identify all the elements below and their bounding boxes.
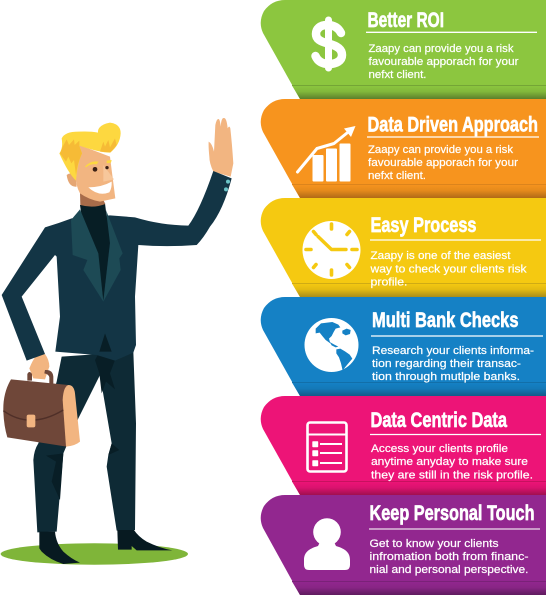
text: Easy Process description: profile. bbox=[370, 276, 408, 288]
icon: globe bbox=[304, 318, 358, 372]
text: Better ROI description: nefxt client. bbox=[368, 69, 426, 81]
heading: Data Centric Data: Data Centric Data bbox=[370, 408, 508, 432]
text: Multi Bank description: tion regarding their transac- bbox=[372, 358, 521, 370]
heading: Better ROI: Better ROI bbox=[368, 8, 444, 32]
head bbox=[59, 123, 121, 207]
ground ellipse bbox=[1, 543, 188, 565]
icon: clock bbox=[302, 221, 360, 279]
figure: lower body bbox=[3, 340, 172, 564]
text: Multi Bank description: Research your clients informa- bbox=[372, 345, 534, 357]
trousers bbox=[33, 352, 136, 532]
panel: Data Centric Data bbox=[261, 396, 546, 495]
panel: Easy Process bbox=[261, 198, 546, 297]
hand holding bag bbox=[29, 354, 49, 379]
text: Better ROI description: favourable apporach for your bbox=[368, 56, 519, 68]
panel: Data Driven Approach bbox=[261, 99, 546, 198]
briefcase bbox=[3, 370, 80, 447]
raised hand bbox=[209, 118, 233, 177]
text: Multi Bank description: tion through mutlple banks. bbox=[372, 371, 520, 383]
text: Data Driven description: favourable apporach for your bbox=[368, 157, 518, 169]
icon: rising bar chart bbox=[298, 126, 356, 182]
figure: upper body bbox=[2, 118, 233, 361]
text: Data Driven description: Zaapy can provide you a risk bbox=[368, 144, 513, 156]
text: Data Centric description: anytime anyday to make sure bbox=[371, 456, 528, 468]
turtleneck bbox=[80, 203, 111, 300]
icon: list document bbox=[308, 422, 346, 472]
illustration: businessman waving bbox=[1, 118, 233, 565]
heading: Easy Process: Easy Process bbox=[370, 213, 477, 237]
text: Better ROI description: Zaapy can provide you a risk bbox=[368, 43, 514, 55]
text: Data Centric description: they are still in the risk profile. bbox=[371, 470, 533, 482]
cuff buttons bbox=[226, 180, 230, 184]
jacket bbox=[2, 171, 232, 361]
panel: Multi Bank Checks bbox=[261, 297, 546, 396]
text: Data Driven description: nefxt client. bbox=[368, 170, 426, 182]
text: Easy Process description: way to check your clients risk bbox=[369, 264, 527, 276]
lapels bbox=[71, 209, 123, 302]
panel: Keep Personal Touch bbox=[261, 495, 546, 595]
text: Keep Personal description: infromation both from financ- bbox=[370, 551, 529, 563]
text: Data Centric description: Access your clients profile bbox=[371, 443, 508, 455]
text: Easy Process description: Zaapy is one of the easiest bbox=[370, 250, 511, 262]
text: Keep Personal description: nial and personal perspective. bbox=[370, 564, 528, 576]
jacket vent bbox=[99, 333, 112, 352]
text: Keep Personal description: Get to know your clients bbox=[370, 538, 499, 550]
icon: dollar sign bbox=[316, 20, 342, 68]
panel: Better ROI bbox=[261, 0, 546, 99]
shoes bbox=[39, 530, 172, 564]
icon: person bbox=[304, 518, 350, 570]
